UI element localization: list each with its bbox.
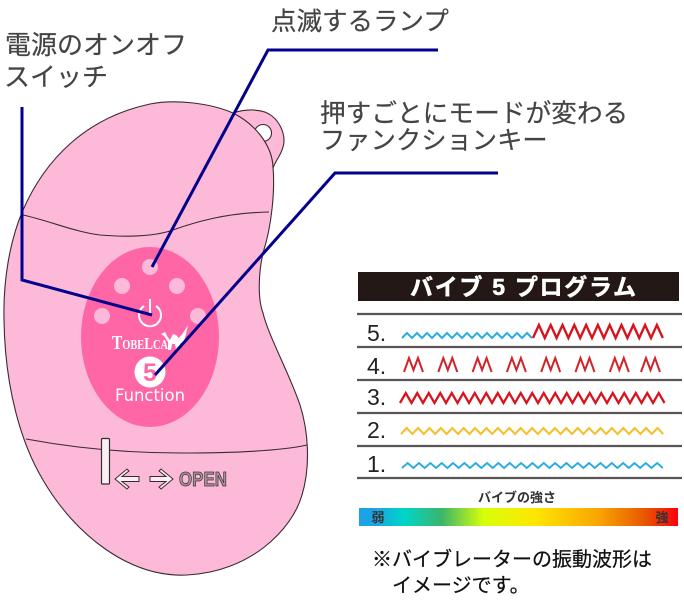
row 5 — [367, 320, 663, 346]
device body — [4, 102, 308, 575]
row dividers — [357, 314, 682, 478]
device illustration — [4, 102, 308, 575]
row 4: 4. — [367, 353, 386, 379]
label: function key: 押すごとにモードが変わる — [320, 99, 628, 128]
leader: function key — [155, 173, 498, 375]
label: lamp: 点滅するランプ — [271, 8, 449, 36]
strength legend title: バイブの強さ — [478, 490, 556, 505]
row 3: 3. — [367, 384, 386, 410]
leader lines — [22, 50, 498, 375]
row 5: 5. — [367, 320, 386, 346]
icon: power — [139, 299, 161, 326]
panel heading: バイブ 5 プログラム — [410, 274, 636, 300]
function key: 5 — [143, 359, 157, 387]
logo: TOBELCA — [112, 332, 168, 354]
strength gradient bar — [359, 508, 678, 526]
indicator lamps — [94, 259, 206, 324]
row 3 — [367, 384, 664, 410]
leader: power switch — [22, 107, 152, 315]
panel heading — [358, 272, 679, 301]
row 2 — [367, 417, 663, 443]
row 4 — [367, 353, 660, 379]
lower seam — [26, 439, 307, 453]
footnote: イメージです。 — [392, 575, 530, 597]
row 2: 2. — [367, 417, 386, 443]
slider latch — [102, 438, 110, 484]
row 1: 1. — [367, 451, 386, 477]
leader: lamp — [152, 50, 438, 267]
arrow: left — [115, 469, 139, 489]
panel: vibration programs — [357, 272, 682, 478]
footnote: ※バイブレーターの振動波形は — [372, 547, 652, 571]
open label: OPEN — [179, 469, 227, 491]
control panel — [81, 247, 219, 427]
label: function key: ファンクションキー — [320, 127, 548, 155]
label: power switch: 電源のオンオフ — [5, 30, 187, 60]
strong label: 強 — [655, 510, 669, 525]
logo — [112, 325, 188, 354]
upper seam — [23, 212, 269, 236]
label: power switch: スイッチ — [4, 62, 108, 92]
weak label: 弱 — [371, 510, 385, 525]
function key — [134, 356, 166, 388]
row 1 — [367, 451, 663, 477]
device strap loop — [233, 110, 284, 168]
arrow: right — [150, 469, 173, 489]
function label: Function — [115, 386, 185, 406]
